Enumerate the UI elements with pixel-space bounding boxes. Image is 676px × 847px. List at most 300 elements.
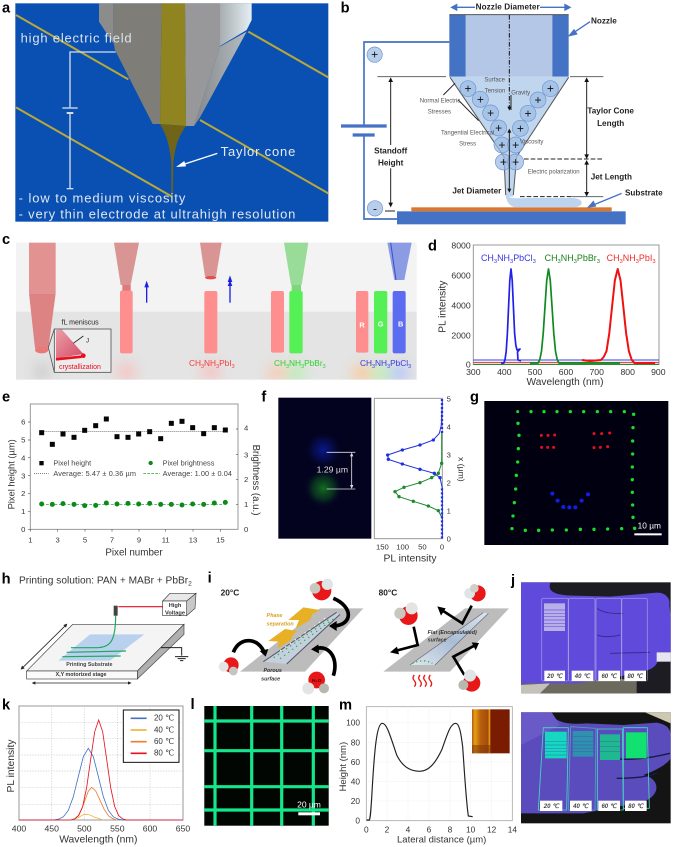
panel letter l: l bbox=[190, 696, 195, 713]
bold labels bbox=[373, 3, 663, 197]
circuit lines bbox=[62, 52, 116, 189]
compound labels: 3 bbox=[286, 364, 289, 370]
porous surface label bbox=[261, 668, 282, 682]
y axis labels: 4000 bbox=[451, 300, 471, 310]
compound labels: NH bbox=[204, 358, 216, 368]
y labels: 2 bbox=[21, 489, 25, 498]
series labels: NH bbox=[561, 253, 574, 263]
high voltage box: High bbox=[169, 603, 182, 609]
plus signs: + bbox=[512, 138, 519, 152]
high voltage box: Voltage bbox=[165, 610, 185, 616]
x axis labels: 400 bbox=[497, 367, 512, 377]
right y labels: 2 bbox=[447, 478, 451, 487]
small force labels: Stress bbox=[459, 142, 476, 148]
plot frame bbox=[473, 245, 659, 364]
axis titles: Wavelength (nm) bbox=[527, 377, 603, 388]
y labels: 4 bbox=[21, 453, 26, 462]
right axis values: 1 bbox=[244, 500, 248, 509]
y axis title: PL intensity bbox=[6, 739, 17, 793]
plus signs: + bbox=[371, 48, 378, 62]
small force labels: Gravity bbox=[511, 90, 530, 96]
series labels: CH bbox=[545, 253, 558, 263]
printed lines and nozzle feed bbox=[62, 615, 126, 657]
20 C curve bbox=[19, 748, 183, 820]
liquid cone and jet bbox=[449, 77, 582, 207]
y labels: 0 bbox=[355, 816, 360, 826]
right axis values: 2 bbox=[244, 475, 248, 484]
pixel height points bbox=[39, 416, 228, 447]
plus signs: + bbox=[534, 93, 541, 107]
temperature labels: 20°C bbox=[221, 588, 239, 598]
x labels: 450 bbox=[44, 823, 59, 833]
right axis values bbox=[244, 424, 249, 534]
y labels: 40 bbox=[351, 776, 360, 786]
UV labels: 60 ℃ bbox=[601, 803, 618, 810]
inset: meniscus: J bbox=[86, 339, 89, 345]
average lines bbox=[42, 431, 225, 504]
plus signs: + bbox=[547, 82, 554, 96]
plus signs: + bbox=[498, 138, 505, 152]
blue smile dots bbox=[550, 492, 590, 509]
x labels: 7 bbox=[110, 535, 114, 544]
distance marker bbox=[317, 452, 355, 489]
porous strip bbox=[263, 612, 340, 664]
compound labels bbox=[189, 358, 411, 370]
curved moisture arrows bbox=[233, 598, 348, 676]
bold labels: Substrate bbox=[625, 188, 663, 197]
y labels: 5 bbox=[21, 436, 25, 445]
curved arrow heads bbox=[260, 621, 337, 657]
label: Taylor cone with arrow bbox=[176, 144, 295, 167]
nozzle 1 bbox=[29, 243, 56, 353]
x labels: 5 bbox=[83, 535, 87, 544]
plus signs: - bbox=[373, 201, 377, 215]
compound labels: NH bbox=[375, 358, 387, 368]
legend: 60 ℃ bbox=[154, 737, 174, 746]
panel l: printed line grid bbox=[204, 706, 329, 826]
label: Taylor cone with arrow: Taylor cone bbox=[221, 144, 295, 159]
water molecule bottom with label bbox=[302, 672, 329, 694]
small force labels: Tangential Electrical bbox=[441, 131, 494, 137]
legend: Pixel height bbox=[53, 458, 91, 467]
right axis values: 4 bbox=[244, 424, 249, 433]
inset: meniscus bbox=[48, 319, 111, 372]
water molecule right left bbox=[394, 602, 418, 625]
x labels: 150 bbox=[376, 542, 389, 551]
compound labels: CH bbox=[360, 358, 372, 368]
series labels: CH bbox=[481, 253, 494, 263]
daylight labels bbox=[544, 671, 646, 681]
stage label: X,Y motorized stage bbox=[56, 672, 106, 678]
panel j: photographs bbox=[510, 573, 671, 823]
panel h: printing setup bbox=[2, 571, 196, 685]
bullet text: - low to medium viscosity bbox=[19, 190, 186, 205]
green profile bbox=[393, 432, 443, 518]
right y labels: 3 bbox=[447, 450, 451, 459]
x labels: 9 bbox=[137, 535, 141, 544]
fluorescence image bbox=[278, 398, 371, 539]
legend: 20 ℃ bbox=[154, 714, 174, 723]
daylight photo bbox=[521, 582, 671, 693]
series labels: 3 bbox=[558, 259, 561, 265]
UV labels: 80 ℃ bbox=[628, 803, 644, 810]
heat waves bbox=[413, 675, 432, 687]
compound labels: 3 bbox=[301, 364, 304, 370]
bold labels: Standoff bbox=[374, 146, 407, 155]
series labels: 3 bbox=[652, 259, 656, 265]
plot frame bbox=[19, 706, 183, 820]
legend: Average: 1.00 ± 0.04 bbox=[163, 469, 232, 478]
y labels: 1 bbox=[21, 507, 25, 516]
panel letter e: e bbox=[2, 390, 10, 406]
UV labels bbox=[540, 801, 647, 811]
panel letter c: c bbox=[2, 232, 10, 248]
plus signs: + bbox=[495, 121, 502, 135]
solution title: 2 bbox=[188, 580, 192, 587]
charged circles bbox=[367, 47, 558, 216]
high voltage box bbox=[163, 593, 196, 616]
right y labels: 0 bbox=[447, 534, 451, 543]
left plate bbox=[240, 608, 363, 672]
small force labels: Tension bbox=[485, 89, 505, 95]
axis titles: PL intensity bbox=[437, 280, 448, 333]
small force labels: Surface bbox=[484, 78, 506, 84]
x labels: 650 bbox=[176, 823, 190, 833]
bounce arrow heads bbox=[390, 606, 479, 654]
nozzle 4 with pillars bbox=[271, 243, 308, 353]
compound labels: 3 bbox=[232, 364, 235, 370]
series labels: 3 bbox=[533, 259, 536, 265]
bold labels: Nozzle Diameter bbox=[476, 3, 540, 12]
arrow heads bbox=[388, 77, 589, 207]
lift arrow 2 bbox=[228, 275, 232, 303]
bullet text: - very thin electrode at ultrahigh resolution bbox=[19, 206, 295, 221]
porous surface label: Porous bbox=[263, 668, 282, 674]
right axis values: 0 bbox=[244, 525, 248, 534]
axis titles bbox=[437, 280, 603, 388]
lift arrow 1 bbox=[144, 281, 149, 303]
x labels: 3 bbox=[56, 535, 60, 544]
y axis labels: 0 bbox=[466, 359, 471, 369]
compound labels: CH bbox=[189, 358, 201, 368]
bounce arrows bbox=[395, 606, 474, 675]
panel letter g: g bbox=[470, 390, 479, 406]
plot frame bbox=[366, 707, 512, 821]
daylight labels: 40 ℃ bbox=[574, 673, 591, 680]
scale bar: 20 µm bbox=[297, 800, 321, 810]
solution title: Printing solution: PAN + MABr + PbBr bbox=[19, 575, 188, 586]
x labels: 2 bbox=[385, 825, 390, 835]
panel g: smiley dot array bbox=[470, 390, 668, 545]
panel letter b: b bbox=[341, 1, 350, 17]
x labels: 600 bbox=[143, 823, 157, 833]
x labels: 12 bbox=[487, 825, 497, 835]
plus signs: + bbox=[517, 121, 524, 135]
x labels bbox=[376, 542, 444, 551]
water molecule right bottom bbox=[458, 670, 480, 692]
daylight labels: 60 ℃ bbox=[601, 673, 618, 680]
axis titles: Height (nm) bbox=[338, 742, 349, 791]
legend: 80 ℃ bbox=[154, 749, 174, 758]
plus signs: + bbox=[487, 106, 494, 120]
temperature labels: 80°C bbox=[379, 588, 397, 598]
x axis labels: 800 bbox=[620, 367, 635, 377]
height curve bbox=[367, 723, 473, 820]
panel letter f: f bbox=[261, 390, 266, 406]
flat surface label: surface bbox=[428, 638, 447, 644]
x axis labels: 600 bbox=[559, 367, 573, 377]
phase separation label bbox=[267, 613, 294, 627]
phase separation label: Phase bbox=[267, 613, 282, 619]
inset: meniscus: crystallization bbox=[59, 364, 101, 371]
y axis labels bbox=[451, 240, 471, 369]
phase separation arrows bbox=[268, 607, 320, 648]
compound labels: PbI bbox=[219, 358, 232, 368]
series labels: PbBr bbox=[577, 253, 597, 263]
x axis labels: 500 bbox=[528, 367, 542, 377]
daylight labels: 80 ℃ bbox=[627, 673, 644, 680]
right y labels: 5 bbox=[447, 395, 451, 404]
electrode wires bbox=[16, 15, 328, 197]
x labels bbox=[364, 825, 517, 835]
series labels: NH bbox=[497, 253, 510, 263]
x labels: 6 bbox=[427, 825, 432, 835]
flat surface label bbox=[428, 630, 477, 644]
x axis labels: 700 bbox=[589, 367, 604, 377]
substrate label: Printing Substrate bbox=[66, 662, 112, 668]
x axis title: Wavelength (nm) bbox=[59, 835, 137, 846]
x axis labels: 900 bbox=[651, 367, 666, 377]
80 C curve bbox=[19, 720, 183, 820]
substrate and base bbox=[397, 207, 626, 224]
x labels: 4 bbox=[406, 825, 411, 835]
plus signs bbox=[371, 48, 554, 215]
panel letter a: a bbox=[2, 1, 11, 17]
red connection wire bbox=[118, 605, 163, 608]
x labels bbox=[12, 823, 190, 833]
centre axis bbox=[508, 15, 511, 108]
panel letter m: m bbox=[339, 697, 352, 713]
legend bbox=[123, 710, 179, 762]
y axis title: x (µm) bbox=[456, 457, 466, 482]
x labels bbox=[28, 535, 225, 544]
baselines bbox=[473, 360, 659, 364]
plus signs: + bbox=[477, 92, 484, 106]
x axis labels bbox=[466, 367, 666, 377]
right axis title: Brightness (a.u.) bbox=[250, 445, 261, 515]
blue pointer arrows bbox=[452, 5, 622, 207]
nozzle body bbox=[449, 15, 569, 77]
legend: Pixel brightness bbox=[163, 458, 215, 467]
nozzle 2 with pillar bbox=[114, 243, 139, 353]
UV labels: 40 ℃ bbox=[572, 803, 589, 810]
bold labels: Jet Diameter bbox=[452, 186, 502, 195]
series labels: PbI bbox=[639, 253, 652, 263]
tick marks bbox=[28, 422, 238, 532]
small force labels: Electric polarization bbox=[528, 169, 580, 175]
60 C curve bbox=[72, 787, 117, 820]
compound labels: NH bbox=[289, 358, 301, 368]
y axis labels: 8000 bbox=[451, 240, 471, 250]
right y labels bbox=[447, 395, 452, 543]
green peak bbox=[530, 269, 620, 363]
panel c: printing sequence bbox=[2, 232, 417, 382]
y axis labels: 2000 bbox=[451, 330, 471, 340]
compound labels: 3 bbox=[372, 364, 375, 370]
plus signs: + bbox=[524, 106, 531, 120]
panel e: pixel height and brightness bbox=[2, 390, 261, 558]
right y labels: 1 bbox=[447, 506, 451, 515]
compound labels: CH bbox=[274, 358, 286, 368]
y labels bbox=[21, 418, 26, 534]
UV labels: 20 ℃ bbox=[543, 803, 560, 810]
y labels: 80 bbox=[351, 737, 360, 747]
dotted axis series bbox=[438, 399, 445, 539]
green frame dots bbox=[510, 410, 636, 532]
x labels: 400 bbox=[12, 823, 26, 833]
compound labels: PbCl bbox=[390, 358, 408, 368]
wires and battery bbox=[341, 42, 449, 219]
series labels: 3 bbox=[597, 259, 600, 265]
x labels: 15 bbox=[216, 535, 225, 544]
x labels: 11 bbox=[162, 535, 170, 544]
right axis values: 3 bbox=[244, 450, 248, 459]
label: high electric field: high electric field bbox=[21, 30, 132, 45]
nozzle 5 with RGB pillars: G bbox=[378, 320, 384, 329]
compound labels: 3 bbox=[323, 364, 326, 370]
panel a: Taylor cone render bbox=[2, 1, 328, 222]
nozzle 5 with RGB pillars: B bbox=[398, 320, 403, 329]
series labels: 3 bbox=[510, 259, 513, 265]
x labels: 0 bbox=[440, 542, 444, 551]
right y labels: 4 bbox=[447, 422, 452, 431]
series labels bbox=[481, 253, 656, 265]
x labels: 1 bbox=[28, 535, 32, 544]
series labels: 3 bbox=[620, 259, 623, 265]
plus signs: + bbox=[512, 155, 519, 169]
water molecule right top bbox=[464, 584, 486, 601]
water molecule top bbox=[310, 579, 333, 600]
y axis labels: 6000 bbox=[451, 270, 471, 280]
right plate bbox=[383, 608, 509, 672]
y labels: 100 bbox=[346, 718, 360, 728]
legend bbox=[34, 458, 232, 478]
scale bar bbox=[634, 520, 662, 535]
panel letter h: h bbox=[2, 571, 11, 587]
x axis labels: 300 bbox=[466, 367, 481, 377]
porous surface label: surface bbox=[261, 676, 280, 682]
series labels: 3 bbox=[494, 259, 497, 265]
compound labels: 3 bbox=[216, 364, 219, 370]
flat surface label: Flat (Encapsulated) bbox=[428, 630, 477, 636]
panel letter k: k bbox=[2, 697, 11, 713]
bold labels: Nozzle bbox=[591, 16, 617, 25]
series labels: PbCl bbox=[513, 253, 533, 263]
flat strip bbox=[410, 613, 488, 665]
panel m: height profile bbox=[338, 697, 517, 846]
nozzle bbox=[114, 606, 118, 616]
small force labels bbox=[420, 78, 580, 175]
x axis title: PL intensity bbox=[383, 553, 437, 564]
x labels: 8 bbox=[448, 825, 453, 835]
distance marker: 1.29 µm bbox=[317, 465, 348, 475]
motorized stage bbox=[27, 624, 184, 679]
x labels: 13 bbox=[189, 535, 197, 544]
X motion arrow bbox=[32, 681, 132, 685]
inset: meniscus: fL meniscus bbox=[62, 319, 99, 326]
compound labels: 3 bbox=[201, 364, 204, 370]
floor glow bbox=[33, 358, 413, 380]
red eye dots bbox=[540, 431, 611, 449]
y labels: 6 bbox=[21, 418, 25, 427]
series labels: NH bbox=[623, 253, 636, 263]
series labels: CH bbox=[607, 253, 620, 263]
daylight labels: 20 ℃ bbox=[546, 673, 563, 680]
small force labels: Stresses bbox=[428, 110, 451, 116]
panel i: surface morphology and moisture bbox=[208, 570, 509, 694]
x labels: 10 bbox=[466, 825, 476, 835]
AFM inset bbox=[472, 709, 510, 753]
x labels: 100 bbox=[396, 542, 409, 551]
red peak bbox=[582, 269, 655, 363]
40 C curve bbox=[72, 814, 103, 820]
pixel brightness points bbox=[39, 500, 228, 508]
y labels: 60 bbox=[351, 757, 360, 767]
x labels: 550 bbox=[110, 823, 125, 833]
printing substrate bbox=[58, 634, 144, 661]
panel letter j: j bbox=[510, 573, 515, 589]
ground symbol bbox=[161, 648, 188, 661]
phase separation label: separation bbox=[267, 621, 294, 627]
Y motion arrow bbox=[21, 624, 67, 670]
compound labels: 3 bbox=[387, 364, 390, 370]
x labels: 500 bbox=[77, 823, 92, 833]
dimension lines bbox=[377, 77, 603, 211]
dark image bbox=[484, 401, 668, 545]
legend: 40 ℃ bbox=[154, 725, 174, 734]
nozzle 3 with pillar bbox=[200, 243, 222, 353]
bold labels: Height bbox=[378, 159, 404, 168]
panel f: microscope image and intensity profile bbox=[261, 390, 466, 564]
y labels: 3 bbox=[21, 471, 25, 480]
small force labels: Viscosity bbox=[520, 139, 543, 145]
plus signs: + bbox=[500, 155, 507, 169]
x labels: 50 bbox=[418, 542, 427, 551]
series labels: 3 bbox=[636, 259, 639, 265]
temperature labels bbox=[221, 588, 397, 598]
blue profile bbox=[386, 399, 442, 539]
plot frame bbox=[30, 404, 238, 529]
y labels: 20 bbox=[351, 796, 360, 806]
legend: Average: 5.47 ± 0.36 µm bbox=[53, 469, 136, 478]
profile plot frame bbox=[374, 398, 442, 539]
y labels bbox=[346, 718, 360, 826]
axis titles bbox=[338, 742, 486, 846]
nozzle bbox=[99, 3, 252, 200]
blue peak bbox=[501, 269, 521, 363]
plus signs: + bbox=[464, 82, 471, 96]
x axis title: Pixel number bbox=[105, 547, 163, 558]
x labels: 0 bbox=[364, 825, 369, 835]
bold labels: Length bbox=[597, 119, 624, 128]
scale bar: 10 µm bbox=[638, 520, 661, 530]
compound labels: 3 bbox=[408, 364, 411, 370]
bold labels: Taylor Cone bbox=[587, 107, 634, 116]
nozzle 5 with RGB pillars: R bbox=[359, 320, 365, 329]
bold labels: Jet Length bbox=[591, 172, 632, 181]
series labels: 3 bbox=[574, 259, 577, 265]
water molecule bottom with label: H₂O bbox=[312, 678, 322, 684]
